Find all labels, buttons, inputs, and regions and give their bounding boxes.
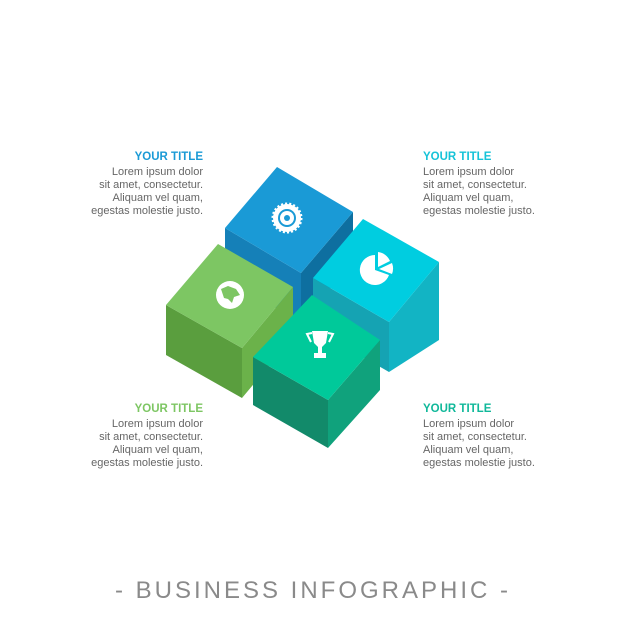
text block: bottom left: Lorem ipsum dolor <box>112 418 203 430</box>
cube: green globe <box>166 244 293 398</box>
icon: trophy <box>307 331 333 358</box>
text block: bottom left: egestas molestie justo. <box>91 457 203 469</box>
text block: bottom right <box>423 403 535 469</box>
text block: bottom left: YOUR TITLE <box>135 403 203 415</box>
footer title: - BUSINESS INFOGRAPHIC - <box>115 577 511 604</box>
icon: gear <box>273 204 301 232</box>
text block: top right <box>423 151 535 217</box>
text block: top left: egestas molestie justo. <box>91 205 203 217</box>
cube: cyan pie chart <box>313 219 439 372</box>
text block: bottom right: Lorem ipsum dolor <box>423 418 514 430</box>
text block: top right: Lorem ipsum dolor <box>423 166 514 178</box>
text block: bottom left: sit amet, consectetur. <box>99 431 203 443</box>
icon: pie chart <box>360 252 393 285</box>
text block: top right: sit amet, consectetur. <box>423 179 527 191</box>
text block: bottom right: Aliquam vel quam, <box>423 444 514 456</box>
text block: bottom right: egestas molestie justo. <box>423 457 535 469</box>
text block: bottom right: YOUR TITLE <box>423 403 491 415</box>
text block: top left: sit amet, consectetur. <box>99 179 203 191</box>
text block: top left: Lorem ipsum dolor <box>112 166 203 178</box>
text block: bottom left <box>91 403 203 469</box>
text block: top left <box>91 151 203 217</box>
text block: top right: Aliquam vel quam, <box>423 192 514 204</box>
text block: top right: YOUR TITLE <box>423 151 491 163</box>
cube: blue gear <box>225 167 353 323</box>
text block: bottom left: Aliquam vel quam, <box>112 444 203 456</box>
icon: globe <box>216 281 244 309</box>
text block: top left: YOUR TITLE <box>135 151 203 163</box>
text block: bottom right: sit amet, consectetur. <box>423 431 527 443</box>
cube: teal trophy <box>253 295 380 448</box>
text block: top right: egestas molestie justo. <box>423 205 535 217</box>
text block: top left: Aliquam vel quam, <box>112 192 203 204</box>
